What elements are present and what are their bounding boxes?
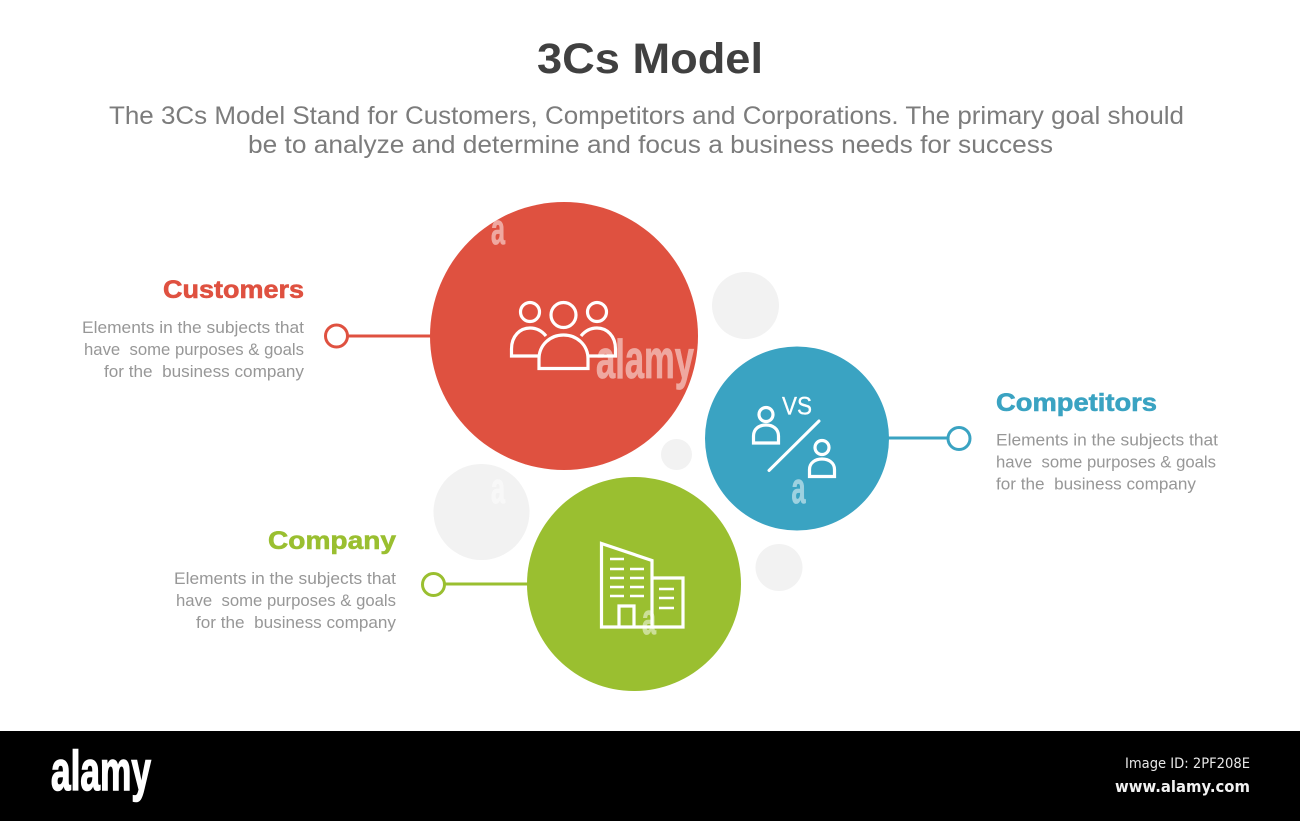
- icon: office building: [602, 544, 683, 627]
- subtitle: [109, 102, 1184, 159]
- title: 3Cs Model: [537, 35, 763, 83]
- icon: group of people: [512, 302, 616, 368]
- heading: competitors: Competitors: [996, 389, 1157, 417]
- watermark: alamy: [596, 328, 694, 390]
- watermark: a: [491, 205, 505, 254]
- subtitle: The 3Cs Model Stand for Customers, Competitors and Corporations. The primary goal should: [109, 102, 1184, 130]
- company description: Elements in the subjects that: [174, 569, 396, 588]
- company connector: [422, 574, 530, 596]
- customers circle: [430, 202, 698, 470]
- competitors connector: [885, 428, 970, 450]
- company description: [174, 569, 396, 632]
- subtitle: be to analyze and determine and focus a business needs for success: [248, 131, 1053, 159]
- panel: customers: [82, 202, 698, 470]
- customers description: have some purposes & goals: [84, 340, 304, 359]
- icon: versus: VS: [782, 392, 812, 420]
- watermark: [491, 205, 806, 644]
- decorative grey bubbles: [434, 272, 802, 591]
- competitors description: [996, 430, 1218, 494]
- footer band: [0, 731, 1300, 821]
- competitors description: Elements in the subjects that: [996, 430, 1218, 450]
- customers description: for the business company: [104, 362, 304, 381]
- icon: versus: [754, 392, 834, 476]
- company circle: [527, 477, 741, 691]
- panel: company: [174, 477, 741, 691]
- panel: competitors: [705, 346, 1218, 530]
- competitors description: have some purposes & goals: [996, 452, 1216, 472]
- footer logo: alamy: [51, 739, 151, 802]
- company description: have some purposes & goals: [176, 591, 396, 610]
- heading: customers: Customers: [163, 276, 304, 304]
- customers description: [82, 318, 304, 381]
- watermark: a: [792, 464, 806, 513]
- heading: company: Company: [268, 527, 396, 555]
- website: www.alamy.com: [1115, 777, 1250, 796]
- competitors circle: [705, 346, 889, 530]
- customers connector: [326, 325, 432, 347]
- image id: Image ID: 2PF208E: [1125, 756, 1250, 772]
- customers description: Elements in the subjects that: [82, 318, 304, 337]
- watermark: a: [491, 464, 505, 513]
- company description: for the business company: [196, 613, 396, 632]
- competitors description: for the business company: [996, 474, 1196, 494]
- watermark: a: [642, 595, 656, 644]
